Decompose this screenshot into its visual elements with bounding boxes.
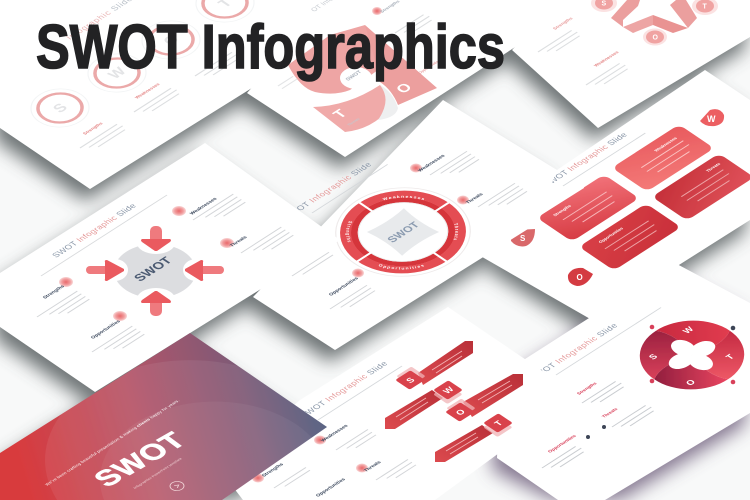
threats text lines bbox=[241, 227, 293, 261]
strengths text lines bbox=[538, 29, 581, 57]
weaknesses text lines bbox=[586, 62, 629, 90]
clover disc bbox=[618, 306, 750, 404]
corner dots bbox=[586, 325, 735, 439]
threats label: Threats bbox=[465, 192, 485, 205]
slide title: SWOT Infographic Slide bbox=[297, 359, 390, 419]
ring chart: SWOT bbox=[385, 220, 423, 245]
slide: top-right star bbox=[512, 0, 750, 128]
weaknesses dot bbox=[314, 436, 326, 444]
side text lines bbox=[278, 76, 297, 89]
T square: T bbox=[492, 419, 505, 427]
arrow down bbox=[141, 226, 171, 251]
strengths text lines bbox=[80, 123, 127, 153]
swot centre badge bbox=[340, 67, 372, 89]
opportunities text lines bbox=[92, 326, 144, 360]
opportunities text lines bbox=[542, 445, 585, 473]
S badge bbox=[591, 0, 617, 12]
opportunities dot bbox=[352, 268, 364, 278]
O drop marker bbox=[568, 268, 593, 286]
cover arcs bbox=[45, 360, 335, 500]
ring chart: Strengths bbox=[345, 221, 352, 242]
slide title: SWOT Infographic Slide bbox=[281, 160, 374, 220]
slide: ribbon bars bbox=[220, 307, 578, 500]
S ring: S bbox=[50, 101, 72, 116]
slide title: SWOT Infographic Slide bbox=[540, 131, 630, 188]
arrow left bbox=[185, 260, 224, 281]
subtitle line bbox=[318, 366, 402, 420]
strengths dot bbox=[59, 277, 73, 287]
threats box bbox=[652, 154, 750, 220]
strengths label: Strengths bbox=[82, 121, 104, 136]
weaknesses text lines bbox=[430, 151, 479, 183]
star bottom right bbox=[653, 15, 688, 33]
cover tagline: We've been crafting beautiful presentation & making clients happy for years. bbox=[44, 398, 181, 487]
weaknesses text lines bbox=[193, 194, 245, 228]
star right arm bbox=[670, 0, 697, 28]
T badge bbox=[692, 0, 718, 15]
threats label: Threats bbox=[347, 117, 361, 127]
ring chart: Opportunities bbox=[378, 264, 424, 270]
S drop marker bbox=[511, 229, 535, 246]
T square bbox=[480, 413, 516, 437]
T ribbon bar bbox=[435, 425, 493, 462]
O letter: O bbox=[683, 378, 698, 387]
opportunities label: Opportunities bbox=[328, 276, 360, 297]
cover sub line: Infographics PowerPoint template bbox=[133, 457, 183, 490]
strengths label: Strengths bbox=[552, 16, 574, 31]
W square: W bbox=[441, 385, 457, 395]
O badge bbox=[643, 28, 667, 46]
threats label: Threats bbox=[229, 235, 249, 248]
strengths dot bbox=[372, 7, 382, 15]
threats label: Threats bbox=[601, 407, 619, 419]
T letter: T bbox=[723, 352, 737, 361]
grey swot hub bbox=[114, 244, 196, 298]
opportunities dot bbox=[113, 311, 127, 321]
T wedge bbox=[313, 85, 386, 132]
strengths box: Strengths bbox=[552, 203, 573, 217]
S square bbox=[393, 366, 428, 390]
slide: arrows bbox=[0, 143, 340, 392]
weaknesses box bbox=[612, 125, 714, 191]
subtitle line bbox=[41, 195, 167, 276]
slide: ring chart bbox=[253, 100, 556, 350]
upper right petal bbox=[365, 25, 437, 105]
slide: clover disc bbox=[497, 263, 750, 500]
threats box: Threats bbox=[705, 161, 722, 173]
threats dot bbox=[220, 238, 234, 248]
star bottom left bbox=[623, 15, 653, 33]
strengths box cut corner bbox=[530, 168, 584, 222]
T letter: T bbox=[330, 107, 351, 121]
O badge: O bbox=[652, 34, 658, 42]
slide: four petal boxes bbox=[470, 70, 750, 320]
swot hub text: SWOT bbox=[130, 254, 175, 284]
strengths text lines bbox=[37, 291, 89, 325]
S ribbon bar bbox=[418, 341, 473, 385]
T badge: T bbox=[702, 4, 708, 10]
weaknesses label: Weaknesses bbox=[593, 50, 620, 68]
weaknesses label: Weaknesses bbox=[417, 154, 447, 173]
O drop marker: O bbox=[576, 273, 583, 282]
O square: O bbox=[453, 408, 467, 417]
weaknesses dot bbox=[410, 164, 422, 172]
W drop marker bbox=[700, 109, 724, 126]
opportunities label: Opportunities bbox=[418, 59, 442, 75]
opportunities text lines bbox=[195, 51, 242, 81]
cover title: SWOT bbox=[88, 428, 193, 492]
ring chart: Weaknesses bbox=[382, 196, 424, 200]
threats text lines bbox=[478, 183, 527, 215]
threats text lines bbox=[612, 404, 655, 432]
threats text lines bbox=[376, 459, 416, 485]
opportunities box: Opportunities bbox=[597, 226, 625, 244]
strengths label: Strengths bbox=[576, 381, 598, 396]
opportunities label: Opportunities bbox=[315, 477, 347, 498]
O letter: O bbox=[393, 81, 416, 96]
weaknesses text lines bbox=[134, 87, 181, 117]
S ring bbox=[19, 81, 101, 135]
T ring bbox=[184, 0, 266, 30]
swot centre badge: SWOT bbox=[345, 70, 364, 82]
slide: cover bbox=[0, 333, 335, 500]
weaknesses box: Weaknesses bbox=[653, 136, 679, 152]
star left arm bbox=[611, 0, 640, 27]
weaknesses dot bbox=[172, 206, 186, 216]
O ribbon bar bbox=[463, 374, 523, 417]
opportunities label: Opportunities bbox=[547, 434, 578, 454]
upper text lines bbox=[395, 14, 433, 38]
W drop marker: W bbox=[707, 114, 716, 124]
cover play icon bbox=[167, 480, 187, 492]
threats dot bbox=[457, 196, 469, 204]
weaknesses label: Weaknesses bbox=[134, 82, 161, 100]
opportunities box bbox=[579, 204, 681, 270]
W ribbon bar bbox=[385, 390, 443, 429]
strengths dot bbox=[252, 474, 264, 482]
S drop marker: S bbox=[520, 234, 526, 243]
weaknesses label: Weaknesses bbox=[189, 197, 219, 216]
strengths box bbox=[537, 175, 639, 241]
S square: S bbox=[404, 376, 417, 385]
strengths label: Strengths bbox=[261, 462, 285, 478]
W ring: W bbox=[105, 65, 130, 82]
main title: SWOT Infographics bbox=[36, 13, 505, 82]
opportunities text lines bbox=[330, 285, 375, 314]
weaknesses label: Weaknesses bbox=[320, 424, 350, 443]
W ring bbox=[76, 46, 158, 100]
slide title: SWOT Infographic Slide bbox=[49, 202, 139, 259]
hub notches bbox=[102, 232, 209, 310]
ring chart: Threats bbox=[454, 222, 458, 240]
weaknesses text lines bbox=[336, 429, 376, 455]
subtitle line bbox=[563, 133, 645, 186]
O ring: O bbox=[160, 33, 183, 48]
slide: top-middle puzzle bbox=[247, 0, 588, 157]
O square bbox=[443, 398, 478, 422]
S letter: S bbox=[646, 352, 660, 361]
strengths label: Strengths bbox=[42, 284, 66, 300]
W letter: W bbox=[680, 325, 696, 335]
arrow right bbox=[86, 260, 124, 281]
slide title: SWOT Infographic Slide bbox=[527, 321, 620, 381]
opportunities label: Opportunities bbox=[90, 319, 122, 340]
ring chart bbox=[335, 188, 471, 276]
S badge: S bbox=[602, 0, 606, 8]
upper left petal bbox=[288, 25, 378, 94]
subtitle line bbox=[556, 308, 661, 375]
threats dot bbox=[356, 464, 368, 472]
arrow up bbox=[141, 291, 171, 316]
strengths text lines bbox=[582, 380, 625, 408]
W square bbox=[430, 380, 466, 404]
subtitle line bbox=[312, 164, 388, 213]
slide: top-left circles bbox=[0, 0, 400, 189]
strengths text lines bbox=[292, 252, 333, 279]
threats label: Threats bbox=[363, 460, 383, 473]
O ring bbox=[130, 13, 212, 67]
strengths text lines bbox=[274, 467, 310, 491]
pale centre blob bbox=[378, 85, 398, 120]
